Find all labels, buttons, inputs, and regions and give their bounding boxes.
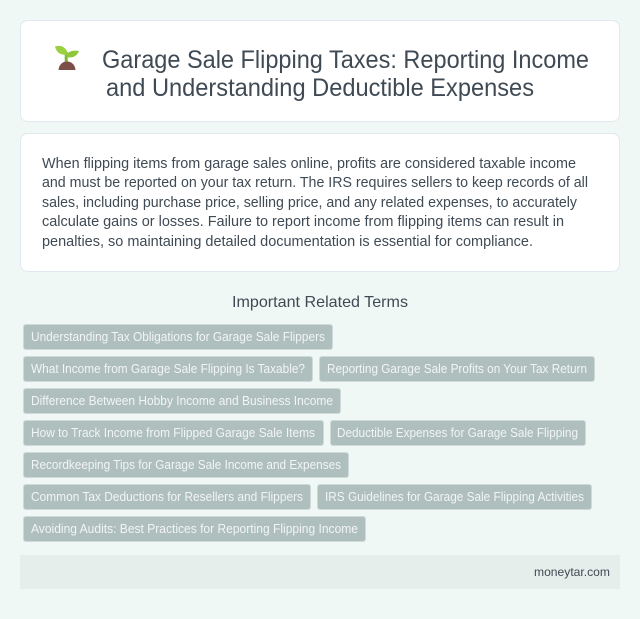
summary paragraph: penalties, so maintaining detailed documentation is essential for compliance. [42,233,533,250]
tag: Deductible Expenses for Garage Sale Flipping [337,426,578,440]
tag: Reporting Garage Sale Profits on Your Tax Return [327,362,587,376]
tag [24,356,312,382]
panel: summary text [20,134,620,272]
tag: IRS Guidelines for Garage Sale Flipping Activities [325,490,584,504]
panel: title card [20,20,620,122]
tag list [24,324,594,542]
tag: What Income from Garage Sale Flipping Is Taxable? [31,362,305,376]
tag: Recordkeeping Tips for Garage Sale Income and Expenses [31,458,341,472]
title: Garage Sale Flipping Taxes: Reporting Income [102,46,589,74]
heading: related terms: Important Related Terms [232,294,408,311]
tag [24,324,332,350]
tag [318,484,592,510]
tag [330,420,586,446]
summary paragraph: calculate gains or losses. Failure to report income from flipping items can result in [42,213,564,230]
title: and Understanding Deductible Expenses [106,74,534,102]
tag [24,388,340,414]
tag [24,516,366,542]
tag [24,484,310,510]
summary paragraph: When flipping items from garage sales online, profits are considered taxable income [42,155,576,172]
summary paragraph [42,155,588,250]
icon: sprout [55,46,79,70]
tag [24,452,348,478]
footer [20,555,620,589]
tag: How to Track Income from Flipped Garage Sale Items [31,426,315,440]
tag: Understanding Tax Obligations for Garage Sale Flippers [31,330,325,344]
tag: Avoiding Audits: Best Practices for Reporting Flipping Income [31,522,358,536]
title [102,46,589,102]
footer source: moneytar.com [534,565,610,579]
tag [320,356,594,382]
tag [24,420,324,446]
tag: Common Tax Deductions for Resellers and Flippers [31,490,303,504]
tag: Difference Between Hobby Income and Business Income [31,394,333,408]
summary paragraph: sales, including purchase price, selling price, and any related expenses, to accurately [42,194,577,211]
summary paragraph: and must be reported on your tax return. The IRS requires sellers to keep records of all [42,174,588,191]
